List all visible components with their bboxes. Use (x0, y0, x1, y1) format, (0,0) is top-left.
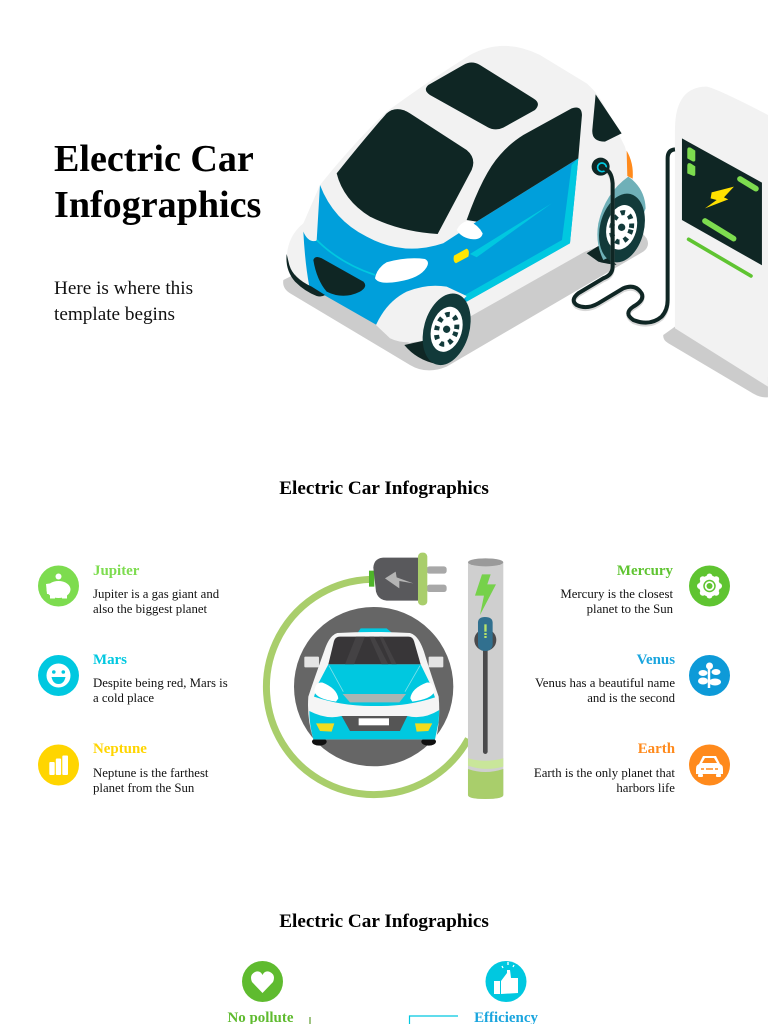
car body (286, 46, 633, 343)
item: Jupiter: Jupiter (93, 563, 140, 579)
front wheel (404, 288, 479, 371)
windscreen (337, 109, 473, 234)
connector: Efficiency (410, 1016, 458, 1024)
connector: No pollute (309, 1017, 311, 1024)
rear wheel (587, 177, 652, 267)
icon: piggy bank (38, 566, 79, 606)
front grille (313, 257, 365, 296)
side window (467, 107, 582, 222)
item: Mercury: planet to the Sun (587, 602, 674, 616)
subtitle: Here is where this (54, 278, 193, 299)
blue door and bonnet panel (303, 158, 578, 325)
car shadow (283, 230, 648, 370)
front wheel arch (376, 286, 467, 342)
item: Neptune: planet from the Sun (93, 781, 195, 795)
lightning icon (705, 187, 734, 208)
charging cable (574, 149, 675, 325)
under front trim (286, 254, 325, 296)
item: Jupiter (93, 563, 220, 616)
indicator (454, 249, 469, 263)
item: Jupiter: Jupiter is a gas giant and (93, 587, 220, 601)
title: Infographics (54, 184, 261, 226)
subtitle: template begins (54, 304, 175, 325)
charger handle (478, 617, 493, 651)
charging post (468, 558, 503, 799)
icon: bar chart (38, 744, 79, 786)
sunroof (426, 62, 538, 129)
headlights and mirror (375, 258, 428, 283)
screen indicators (687, 147, 695, 176)
item: Earth: Earth (638, 741, 676, 757)
title (54, 138, 261, 226)
rear quarter window (592, 94, 622, 142)
item: Earth: harbors life (616, 781, 675, 795)
front car (304, 628, 443, 746)
plug (369, 553, 447, 605)
item: Mars: Despite being red, Mars is (93, 676, 228, 690)
item: Earth (534, 741, 676, 795)
icon: smiley (38, 655, 79, 696)
item: Venus: and is the second (587, 691, 676, 705)
item: Venus: Venus has a beautiful name (535, 676, 675, 690)
icon: thumbs up (486, 961, 526, 1002)
item: Neptune: Neptune (93, 741, 147, 757)
door cyan trim (465, 158, 578, 302)
charging station (663, 87, 768, 397)
item: Earth: Earth is the only planet that (534, 766, 675, 780)
item: Venus (535, 652, 676, 705)
icon: gear (689, 566, 730, 606)
icon: plant (689, 655, 730, 696)
item: Neptune: Neptune is the farthest (93, 766, 209, 780)
item: Mercury (560, 563, 674, 616)
green strip (689, 239, 751, 276)
heading: section two: Electric Car Infographics (279, 478, 489, 499)
station screen (682, 138, 762, 265)
title: Electric Car (54, 138, 254, 180)
item: Neptune (93, 741, 209, 795)
item: Mars: a cold place (93, 691, 154, 705)
grey disc (294, 607, 453, 766)
illustration: front car with charging post (266, 553, 503, 799)
item: Jupiter: also the biggest planet (93, 602, 208, 616)
rear orange light (627, 151, 633, 179)
icon: car (689, 744, 730, 786)
icon: heart (242, 961, 283, 1002)
side crease (470, 203, 552, 257)
bolt icon (475, 574, 496, 615)
green cable ring (266, 579, 468, 795)
hood (314, 664, 435, 706)
item: Mars (93, 652, 228, 705)
windscreen (328, 637, 421, 664)
item: Mercury: Mercury is the closest (560, 587, 673, 601)
item: Venus: Venus (637, 652, 675, 668)
item: Mercury: Mercury (617, 563, 674, 579)
heading: section three: Electric Car Infographics (279, 911, 489, 932)
illustration: isometric electric car charging (283, 46, 768, 397)
subtitle (54, 278, 193, 325)
item: Mars: Mars (93, 652, 127, 668)
